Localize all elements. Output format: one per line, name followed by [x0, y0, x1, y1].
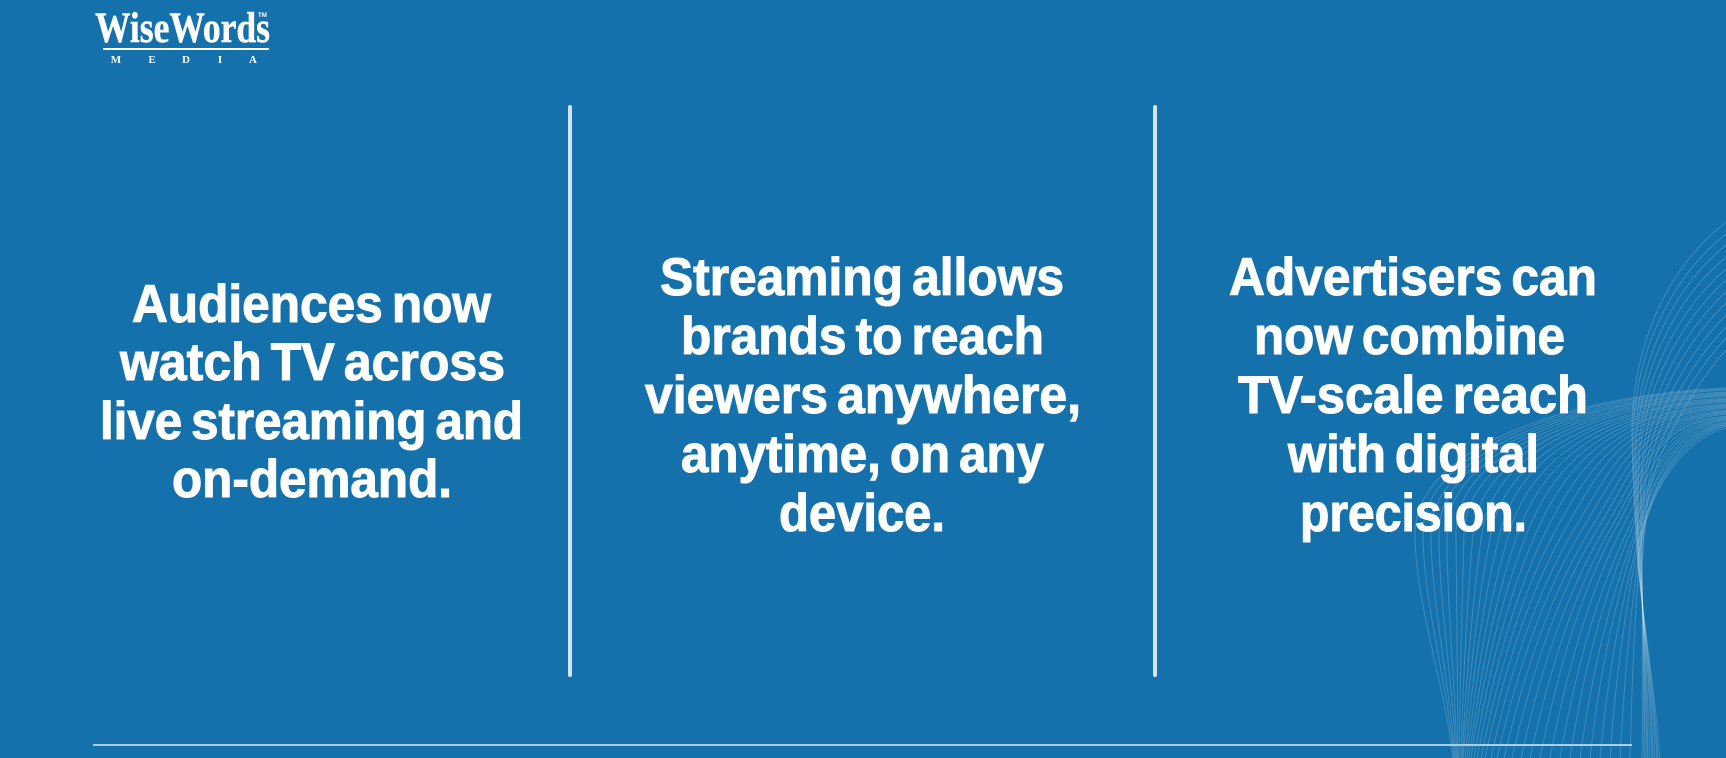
text block: audiences — [100, 275, 523, 509]
text block: audiences: on-demand. — [172, 450, 452, 509]
text block: streaming: viewers anywhere, — [645, 366, 1081, 425]
text block: streaming: anytime, on any — [681, 425, 1044, 484]
text block: streaming — [645, 248, 1081, 543]
logo: WiseWords Media: M — [111, 54, 122, 66]
logo: WiseWords Media: E — [148, 54, 156, 66]
text block: audiences: Audiences now — [132, 275, 492, 334]
logo: WiseWords Media — [95, 5, 270, 66]
text block: audiences: live streaming and — [100, 392, 523, 451]
decorative wave line pattern — [1415, 222, 1726, 758]
text block: advertisers — [1229, 248, 1597, 543]
text block: streaming: device. — [779, 484, 945, 543]
logo: WiseWords Media: A — [249, 54, 257, 66]
text block: streaming: brands to reach — [681, 307, 1044, 366]
logo: WiseWords Media: TM — [258, 13, 267, 19]
text block: advertisers: precision. — [1300, 484, 1527, 543]
text block: audiences: watch TV across — [119, 333, 505, 392]
logo: WiseWords Media: WiseWords — [95, 5, 270, 52]
logo: WiseWords Media: I — [218, 54, 222, 66]
text block: streaming: Streaming allows — [660, 248, 1064, 307]
text block: advertisers: TV-scale reach — [1238, 366, 1588, 425]
text block: advertisers: Advertisers can — [1229, 248, 1597, 307]
logo: WiseWords Media: D — [182, 54, 190, 66]
text block: advertisers: with digital — [1287, 425, 1539, 484]
text block: advertisers: now combine — [1254, 307, 1565, 366]
